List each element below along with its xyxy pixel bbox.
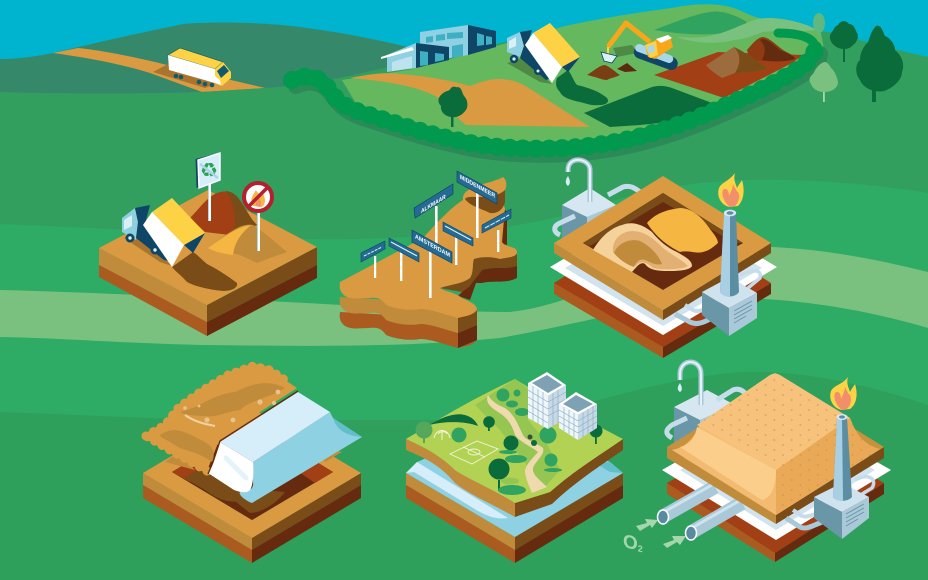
sand slab corners: [667, 380, 884, 515]
waste mound, core: [614, 240, 662, 267]
green slab side right: [515, 439, 623, 517]
sign: recycling crossed out: ♻: [200, 158, 218, 182]
base slab: [554, 215, 771, 358]
green slab top: [406, 379, 623, 503]
map corner, shaded faces: [458, 309, 477, 348]
background: far teal hill: [0, 23, 420, 110]
panel: block 5, restored landscape: [406, 372, 623, 563]
white liner sheet: [662, 405, 891, 540]
tipping truck on field: [507, 23, 608, 105]
tree on orange field: [438, 87, 467, 127]
arrow: oxygen in, bottom: [663, 536, 686, 548]
trees: [416, 388, 602, 495]
pit interior: [583, 193, 743, 290]
arrow: oxygen in, top: [636, 519, 658, 531]
small sign north east: [482, 209, 511, 233]
waste mound, yellow: [647, 208, 718, 253]
pit back walls: [583, 193, 743, 246]
flare box: [702, 277, 757, 336]
panel: block 4, capped soil: [143, 366, 362, 563]
base slab: [667, 420, 884, 562]
white liner sheet: [550, 200, 777, 335]
sand blanket: [146, 366, 297, 471]
panel: block 1, dumping soil: [99, 153, 317, 336]
background: darker foreground: [0, 372, 928, 580]
waste mound, pale: [593, 223, 692, 272]
back mound: [747, 37, 795, 61]
soil frame top: [554, 176, 771, 310]
flare pipes: [786, 477, 874, 528]
small sign centre: [389, 238, 419, 262]
light strip: [677, 18, 817, 43]
map lower layer: [340, 312, 477, 348]
lower soil slab: [406, 473, 515, 550]
sign posts: [374, 190, 499, 298]
panel: block 6, sand cap with oxygen pipes: [623, 362, 891, 562]
chimney: [833, 414, 852, 501]
distant hedge: [429, 414, 478, 426]
oxygen pipes: [658, 485, 742, 540]
front mound: [706, 47, 768, 78]
tipping truck: [122, 198, 205, 267]
apartment building, left: [528, 372, 566, 429]
sign: Alkmaar: ALKMAAR: [421, 193, 446, 216]
flame: [830, 377, 857, 410]
small sign east: [443, 222, 473, 246]
buildings: [381, 25, 496, 72]
foil wall, front white: [208, 442, 253, 492]
foil wall, top: [220, 392, 330, 462]
sign: Amsterdam: AMSTERDAM: [415, 234, 450, 259]
sign: no fire: [244, 183, 272, 251]
foil teal corner: [595, 462, 623, 473]
footpath: [487, 395, 547, 493]
apartment building, right: [559, 392, 597, 440]
sand mound, front: [208, 225, 287, 263]
sand pile left slope: [680, 427, 776, 500]
trees on the right: [810, 13, 903, 102]
winding road with lorry: [53, 48, 265, 92]
small sign west: [361, 241, 385, 262]
sign: Middenmeer: MIDDENMEER: [460, 174, 496, 200]
waste mound, inner: [613, 231, 688, 269]
background: light winding path: [0, 247, 928, 346]
red-brown field: [654, 52, 803, 98]
map upper lake: [465, 190, 505, 213]
sand pile right slope: [776, 418, 880, 515]
sign: Middenmeer: [457, 171, 497, 204]
foil highlight: [406, 462, 508, 519]
sand slab sides: [667, 447, 884, 524]
hedge shadow: [296, 54, 820, 155]
water box with tap: [667, 362, 745, 468]
dark hump: [654, 12, 747, 34]
farmland hills: [342, 4, 825, 145]
panel: block 3, contained landfill with gas flare: [550, 160, 777, 358]
label: O2: O: [623, 531, 638, 555]
pipes to flare box: [675, 271, 760, 323]
water box with tap: [555, 160, 640, 262]
foil wall, teal corner: [333, 418, 362, 437]
sign: recycling crossed out: [196, 153, 220, 221]
map top surface: [340, 177, 517, 318]
chimney: [720, 210, 739, 297]
foil wall, right side: [240, 412, 362, 503]
map middle layer: [340, 297, 477, 333]
sand pile top: [697, 374, 850, 470]
excavator: [601, 23, 680, 72]
green slab side left: [406, 439, 515, 517]
football field: [450, 441, 498, 464]
background: lighter band: [0, 180, 928, 420]
pit floor: [172, 424, 333, 520]
soil mound, back: [190, 191, 257, 235]
panel: block 2, map of the Netherlands: [340, 171, 517, 348]
far hill behind the fields: [342, 4, 825, 145]
sand grain dots: [700, 373, 880, 515]
soil piles by excavator: [587, 63, 637, 80]
sand corners: [165, 452, 195, 470]
hedge: [292, 33, 815, 149]
dark green field: [584, 86, 712, 127]
foil liner: [406, 420, 623, 537]
map right dark strip: [502, 208, 507, 245]
spilled green soil: [556, 70, 608, 105]
map east lobe, upper band: [440, 252, 517, 292]
sand pile front base: [672, 373, 880, 515]
background: sky: [0, 0, 928, 120]
darker grass: [475, 379, 560, 487]
playground frame: [434, 430, 450, 440]
foil wall, dark seam: [208, 391, 298, 474]
flare box: [814, 483, 869, 539]
sign: Alkmaar: [414, 184, 453, 218]
soil frame sides: [554, 243, 771, 320]
base frame: [143, 473, 252, 550]
orange field: [350, 73, 590, 127]
flame: [718, 173, 744, 207]
spilled soil: [172, 252, 237, 291]
map east lobe, lower band: [458, 266, 517, 300]
sign: Amsterdam: [412, 230, 452, 263]
label: O2: 2: [638, 543, 643, 554]
